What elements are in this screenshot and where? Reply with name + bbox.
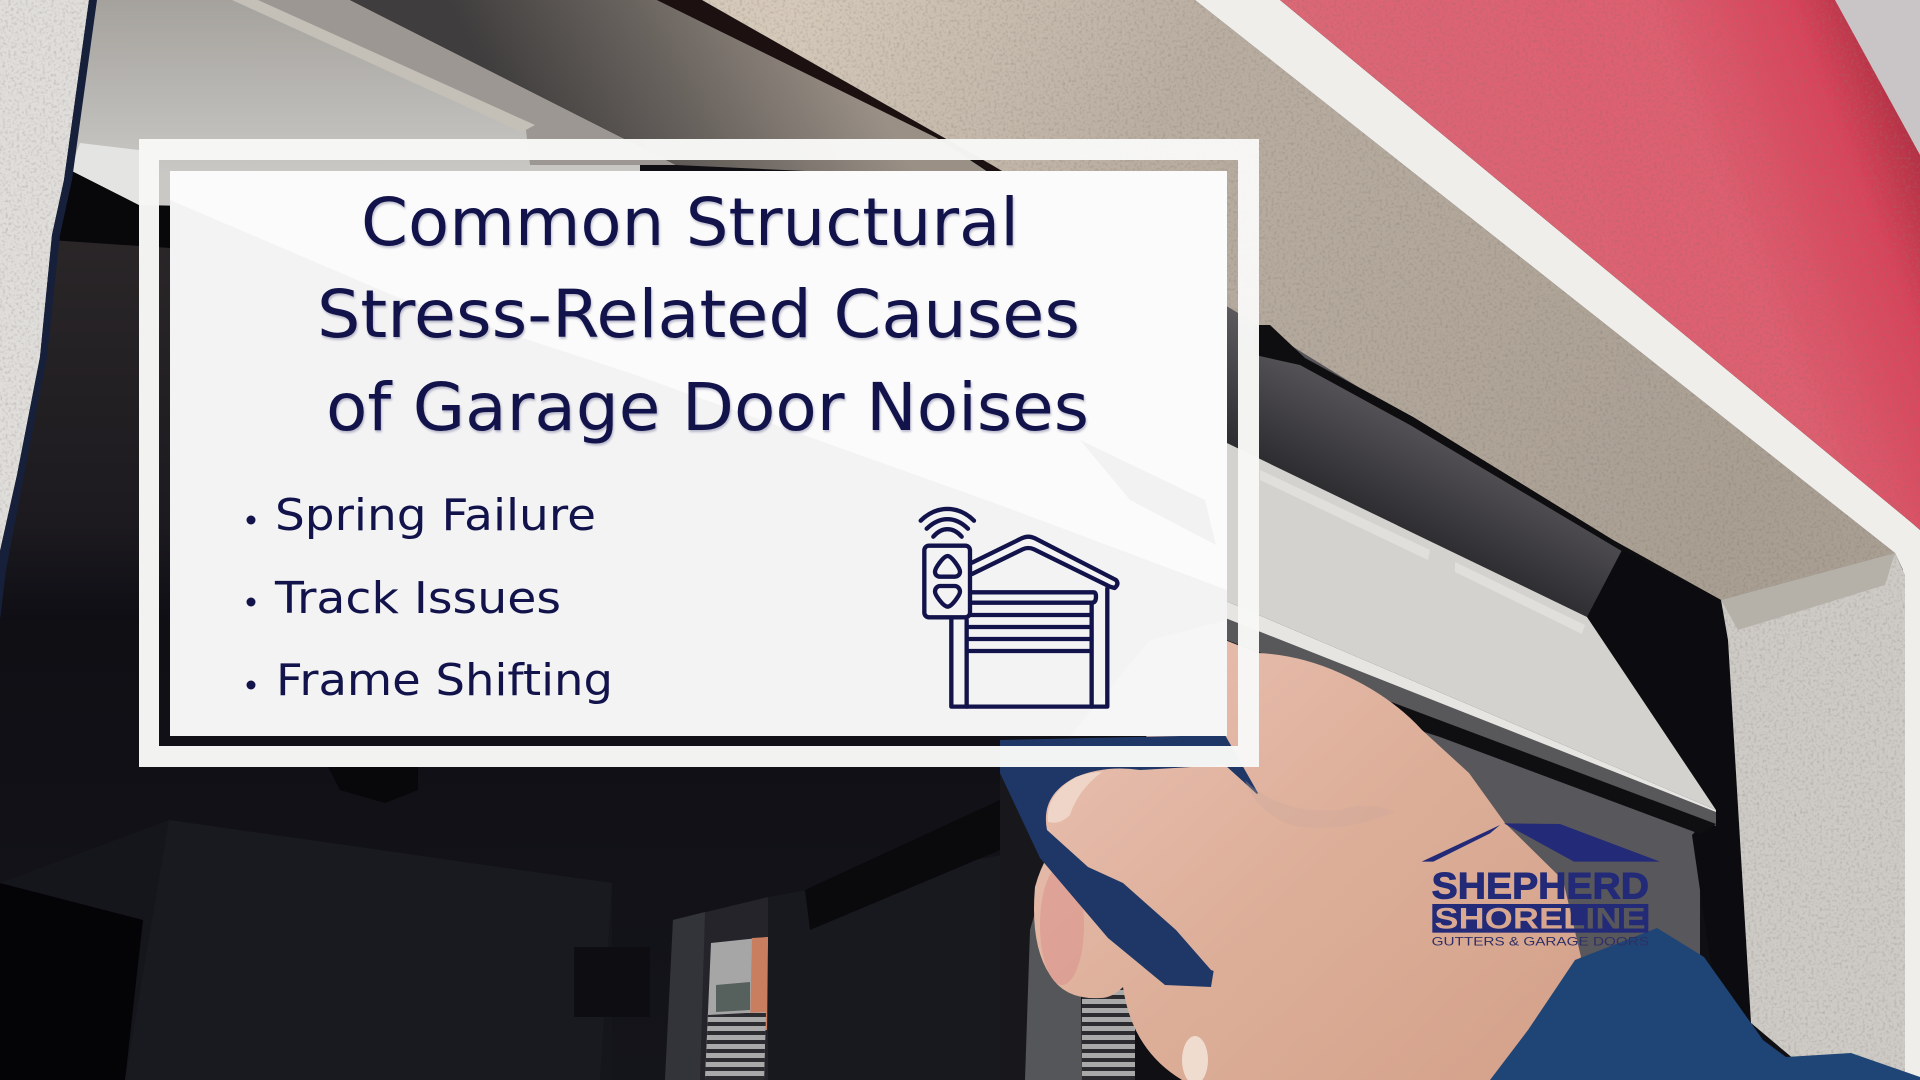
- right stucco: [1721, 553, 1905, 1080]
- finger pink: [1040, 865, 1084, 985]
- black rail, right: [1255, 325, 1721, 600]
- bullet: Track Issues: Track Issues: [274, 573, 561, 624]
- logo wordmark band: [1432, 904, 1648, 933]
- icon: remote: [924, 546, 970, 617]
- bullet list: [246, 490, 613, 706]
- lower white door panel: [1200, 430, 1716, 834]
- black frame: [1587, 550, 1751, 1023]
- fingernail: [1182, 1036, 1208, 1080]
- bullet: Frame Shifting: Frame Shifting: [276, 655, 613, 706]
- logo: Shepherd Shoreline: [1422, 823, 1660, 949]
- title: [317, 184, 1089, 446]
- black rail, left: [657, 0, 1000, 178]
- left stucco: [0, 0, 89, 551]
- interior: back room: [0, 560, 1100, 1080]
- palm crease: [1245, 780, 1395, 828]
- title: Stress-Related Causes: [317, 276, 1080, 353]
- title: of Garage Door Noises: [326, 369, 1089, 446]
- thumbnail: [1048, 772, 1102, 823]
- remote control: [1000, 735, 1258, 987]
- title: Common Structural: [361, 184, 1019, 261]
- upper white door panel: [70, 0, 640, 215]
- white trim: [1195, 0, 1920, 1080]
- beige soffit: [702, 0, 1895, 600]
- thumb: [1046, 765, 1345, 1000]
- left of finger: dark gap and wall: [1000, 790, 1082, 1080]
- interior: window with blinds: [705, 937, 768, 1080]
- blinds behind fingers: [1082, 940, 1135, 1080]
- logo tagline: GUTTERS & GARAGE DOORS: [1432, 935, 1649, 949]
- dark soffit, right: [1200, 290, 1656, 617]
- sleeve: [1490, 928, 1920, 1080]
- icon: house roof and walls: [951, 537, 1117, 707]
- icon: garage with remote control: [921, 509, 1117, 707]
- upper white door: lower rail: [70, 143, 139, 205]
- red wall: [1280, 0, 1920, 530]
- logo roof: [1422, 823, 1660, 862]
- icon: wireless signal: [921, 509, 974, 537]
- bullet: Spring Failure: Spring Failure: [275, 490, 596, 541]
- info card frame: [139, 139, 1259, 767]
- icon: door slats: [968, 592, 1096, 651]
- dark soffit, left: [350, 0, 1000, 180]
- gray wall under door: [1260, 650, 1700, 1080]
- interior: slatted section left: [0, 240, 200, 620]
- top right corner trim: [1835, 0, 1920, 155]
- logo wordmark top: SHEPHERD: [1432, 865, 1649, 907]
- info card panel: [170, 171, 1227, 736]
- hand: [1034, 640, 1581, 1080]
